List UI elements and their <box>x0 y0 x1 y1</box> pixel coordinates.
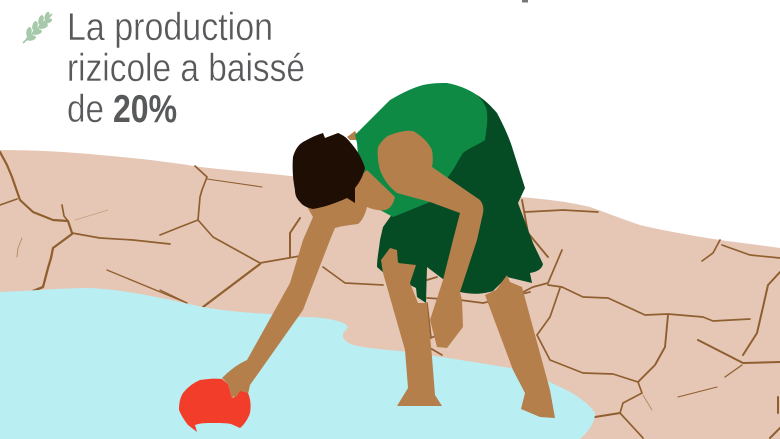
near arm <box>378 131 483 348</box>
heading text <box>67 6 305 131</box>
heading text: de <box>67 88 104 131</box>
shirt <box>355 83 487 217</box>
far arm, neck and face <box>222 170 395 403</box>
cropped text fragment at top edge <box>522 0 528 2</box>
hair <box>293 133 365 209</box>
red bowl <box>179 379 251 432</box>
heading text: La production <box>67 6 273 49</box>
far shoulder sliver <box>347 131 360 140</box>
ground cracks <box>0 152 780 438</box>
skirt <box>377 95 543 303</box>
person <box>222 83 555 418</box>
water pool <box>0 288 595 439</box>
cracked dry ground <box>0 150 780 439</box>
heading text: 20% <box>113 88 177 131</box>
icon: rice stalk <box>23 11 53 43</box>
heading text: rizicole a baissé <box>67 47 305 90</box>
left leg <box>381 248 442 406</box>
right leg <box>485 275 555 418</box>
